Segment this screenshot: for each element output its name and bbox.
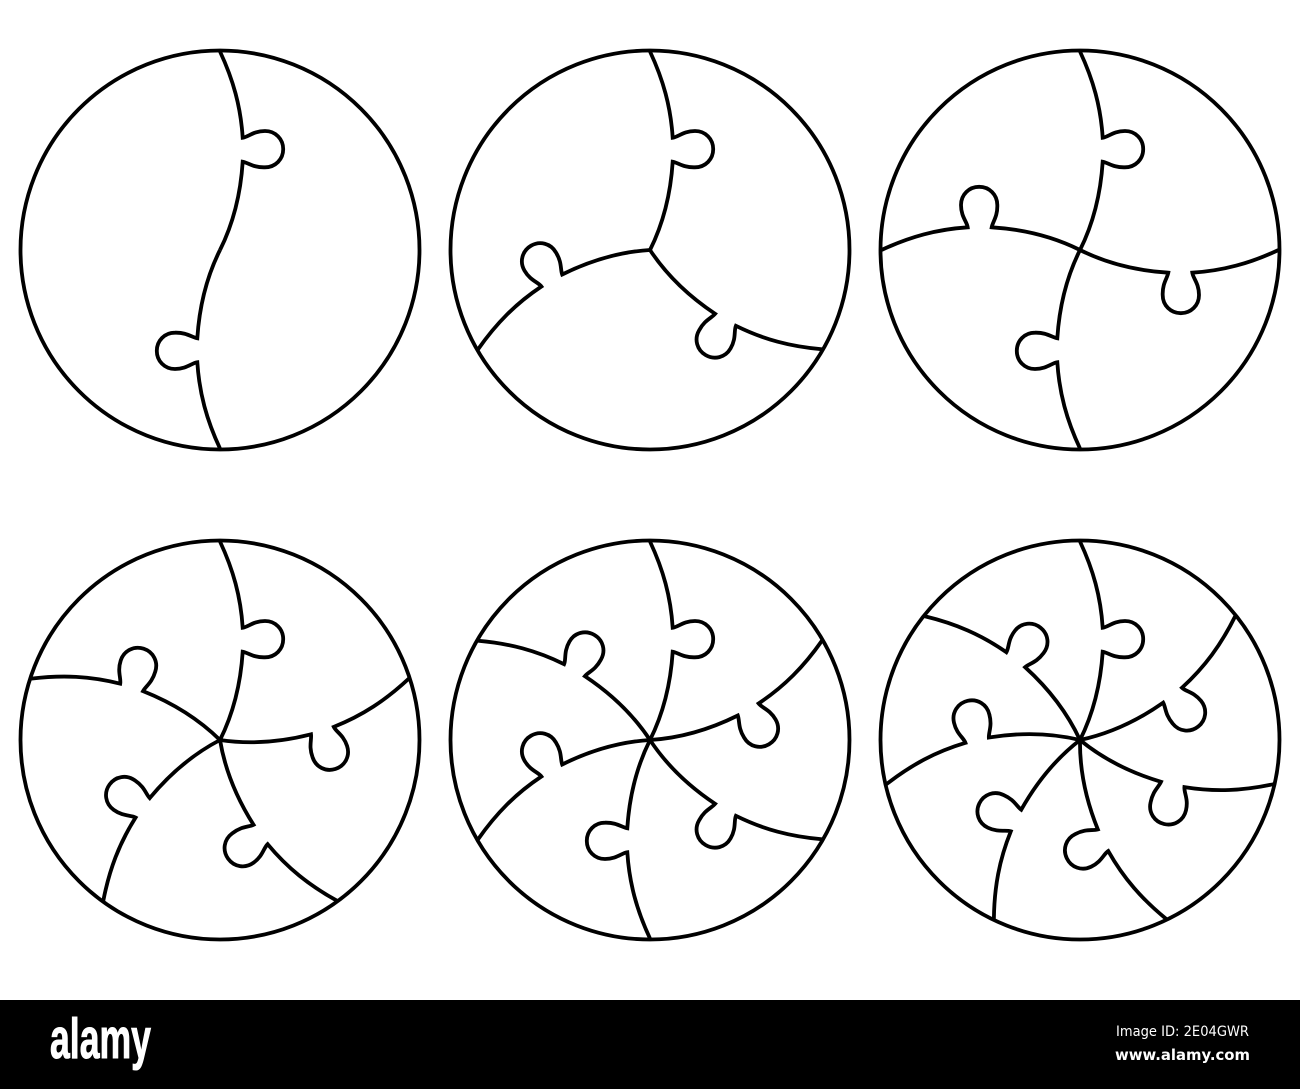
- puzzle circle: 7 pieces: [872, 540, 1280, 946]
- puzzle circle: 3 pieces: [446, 50, 850, 450]
- puzzle circle: 5 pieces: [20, 540, 428, 940]
- website: www.alamy.com: [1115, 1046, 1250, 1064]
- puzzle circle: 4 pieces: [880, 50, 1280, 450]
- puzzle circle: 6 pieces: [446, 540, 854, 940]
- logo: alamy: [50, 1007, 151, 1071]
- footer bar: [0, 1000, 1300, 1089]
- puzzle circle: 2 pieces: [20, 50, 420, 450]
- image id: Image ID: 2E04GWR: [1116, 1024, 1249, 1040]
